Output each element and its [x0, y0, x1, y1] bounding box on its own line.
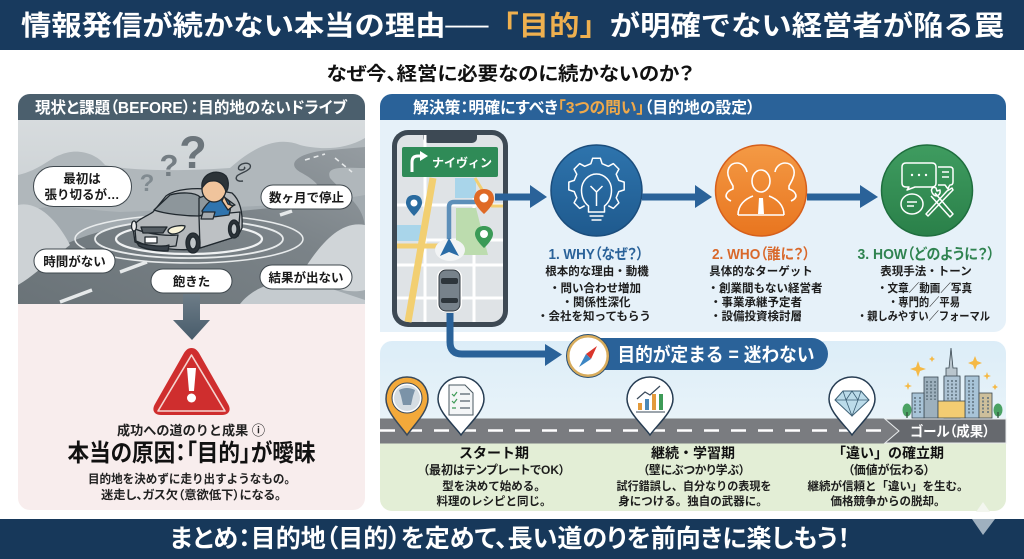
callout: 結果が出ない — [260, 265, 352, 289]
callout: 飽きた: 飽きた — [173, 274, 210, 289]
callout: 最初は張り切るが — [34, 166, 132, 206]
text: why: 根本的な理由・動機 — [545, 264, 649, 278]
marker: pointer tip — [976, 502, 990, 512]
text: learning stage: 身につける。独自の武器に。 — [618, 494, 768, 508]
arrow: car to purpose banner — [450, 313, 545, 354]
icon: warning triangle — [153, 348, 230, 415]
text: how: ・親しみやすい／フォーマル — [857, 309, 990, 323]
panel: before — [18, 94, 365, 510]
text: differentiation stage: 価格競争からの脱却。 — [830, 494, 946, 508]
title banner — [0, 0, 1024, 50]
icon: top-view car — [437, 269, 462, 312]
goal chevron — [885, 419, 1006, 443]
icon: blue pin — [406, 195, 422, 216]
callout: 数ヶ月で停止 — [261, 185, 352, 209]
icon: orange pin — [474, 189, 494, 214]
sign: navigation: ナイヴィン — [432, 155, 492, 170]
subtitle question: なぜ今、経営に必要なのに続かないのか？ — [326, 63, 694, 85]
panel heading: solution: 解決策：明確にすべき「3つの問い」（目的地の設定） — [413, 98, 755, 117]
icon: growth chart pin — [627, 377, 673, 435]
text: learning stage — [616, 445, 772, 508]
callout: 結果が出ない: 結果が出ない — [268, 270, 344, 285]
text: who: ・設備投資検討層 — [710, 309, 802, 323]
callout: 最初は張り切るが: 張り切るが… — [44, 187, 120, 202]
arrow: why to who — [642, 185, 712, 208]
text: who: 2. WHO（誰に？） — [712, 245, 810, 263]
text: who: ・事業承継予定者 — [710, 295, 802, 309]
text: learning stage: 継続・学習期 — [651, 445, 735, 461]
icon: how speech and tools — [882, 145, 972, 236]
icon: checklist pin — [438, 377, 484, 435]
panel heading: before: 現状と課題（BEFORE）：目的地のないドライブ — [35, 98, 348, 117]
text: who — [708, 245, 822, 323]
text: 成功への道のりと成果: 成功への道のりと成果 ⓘ — [117, 423, 265, 438]
text: how — [857, 246, 994, 323]
text: cause explanation: 目的地を決めずに走り出すようなもの。 — [88, 471, 296, 486]
icon: why lightbulb gear — [551, 145, 642, 236]
summary banner — [0, 519, 1024, 559]
text: cause explanation: 迷走し、ガス欠（意欲低下）になる。 — [101, 487, 281, 502]
road label: goal: ゴール（成果） — [910, 424, 990, 440]
area: roadmap text background — [380, 443, 1006, 511]
icon: question marks: ? — [179, 127, 207, 178]
icon: question marks — [140, 127, 207, 197]
arrow: who to how — [807, 185, 878, 208]
illustration: misty road scene — [18, 138, 365, 304]
text: start stage — [423, 445, 565, 508]
text: learning stage: 試行錯誤し、自分なりの表現を — [616, 479, 772, 493]
text: start stage: 料理のレシピと同じ。 — [436, 494, 552, 508]
text: how: 表現手法・トーン — [880, 264, 972, 278]
banner: purpose defined — [590, 338, 828, 370]
summary banner: まとめ：目的地（目的）を定めて、長い道のりを前向きに楽しもう！ — [170, 525, 850, 553]
arrowhead: purpose banner — [545, 344, 562, 366]
icon: question marks: ? — [160, 148, 178, 183]
marker: pointer notch — [972, 519, 995, 535]
illustration: smartphone navigation — [392, 130, 508, 327]
text: how: ・専門的／平易 — [888, 295, 960, 309]
road — [380, 418, 1006, 444]
icon: who people — [716, 145, 806, 236]
text: start stage: （最初はテンプレートでOK） — [423, 462, 565, 477]
icon: compass — [566, 334, 610, 378]
callout: 時間がない: 時間がない — [43, 254, 106, 269]
banner: purpose defined: 目的が定まる = 迷わない — [618, 343, 814, 366]
text: who: 具体的なターゲット — [709, 264, 813, 278]
text: cause explanation — [88, 471, 296, 502]
text: differentiation stage: 継続が信頼と「違い」を生む。 — [808, 479, 968, 493]
text: learning stage: （壁にぶつかり学ぶ） — [643, 462, 745, 477]
icon: dizzy spiral — [236, 163, 250, 181]
callout: 最初は張り切るが: 最初は — [63, 171, 101, 186]
arrow: phone to why — [495, 185, 547, 208]
callout: 時間がない — [34, 249, 115, 273]
text: why: ・関係性深化 — [562, 295, 631, 309]
illustration: goal city — [902, 348, 1002, 418]
callout: 飽きた — [151, 269, 232, 293]
pink result area background — [18, 304, 365, 510]
text: who: ・創業間もない経営者 — [708, 281, 822, 295]
panel heading: solution — [380, 94, 1006, 120]
panel heading: before — [18, 94, 365, 120]
icon: green pin — [475, 226, 493, 248]
text: differentiation stage — [808, 445, 968, 508]
text: start stage: スタート期 — [459, 445, 529, 461]
text: differentiation stage: （価値が伝わる） — [848, 462, 930, 477]
text: why: 1. WHY（なぜ？） — [548, 246, 644, 263]
sign: navigation — [402, 147, 498, 177]
illustration: car and confused driver — [132, 172, 242, 253]
text: why: ・問い合わせ増加 — [549, 281, 641, 295]
text: start stage: 型を決めて始める。 — [442, 479, 546, 493]
text: why — [537, 246, 651, 323]
icon: diamond pin — [829, 377, 875, 435]
text: how: ・文章／動画／写真 — [877, 281, 972, 295]
callout: 数ヶ月で停止: 数ヶ月で停止 — [269, 190, 344, 205]
panel: roadmap — [380, 341, 1006, 512]
text: how: 3. HOW（どのように？） — [858, 246, 994, 263]
icon: question marks: ? — [140, 170, 154, 197]
icon: orange chef pin — [386, 377, 428, 435]
heading: real cause: 本当の原因：「目的」が曖昧 — [68, 439, 316, 467]
arrow: down to cause — [173, 294, 210, 340]
title banner: 情報発信が続かない本当の理由── 「目的」 が明確でない経営者が陥る罠 — [21, 10, 1004, 41]
text: differentiation stage: 「違い」の確立期 — [832, 445, 944, 461]
icon: nav arrow — [435, 238, 465, 261]
text: why: ・会社を知ってもらう — [537, 309, 651, 323]
panel: solution — [380, 94, 1006, 332]
